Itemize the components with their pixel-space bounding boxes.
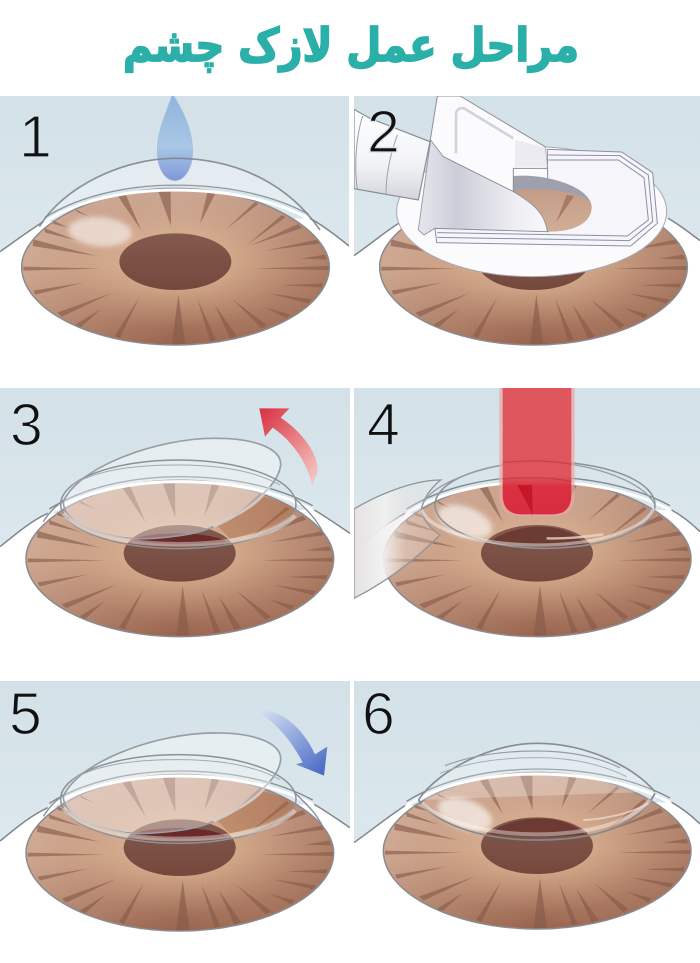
plate edge lines (437, 155, 653, 241)
title: مراحل عمل لازک چشم (123, 18, 579, 73)
folded flap sheet (354, 480, 441, 598)
eye illustration 6 (383, 769, 691, 929)
panel: step 5 replacing the flap (0, 681, 350, 932)
instrument handle (418, 96, 547, 235)
eye illustration 3 (26, 477, 334, 637)
exposed pupil detail (489, 818, 585, 837)
flap bed rings (422, 462, 655, 548)
corneal flap lowering (43, 733, 323, 843)
step number 2: 2 (367, 99, 400, 165)
eye illustration 5 (26, 771, 334, 931)
panel: step 4 laser beam (354, 388, 700, 638)
eye illustration 2 (378, 217, 688, 346)
restored cornea dome and flap rings (418, 743, 655, 840)
eye illustration 4 (383, 477, 691, 637)
eyeball sclera 4 (354, 510, 700, 671)
eyeball sclera 1 (0, 218, 349, 381)
corneal dome outline 1 (39, 158, 320, 230)
arrow: blue closing arrow (254, 711, 327, 776)
panel: step 1 anaesthetic drop (0, 96, 349, 346)
corneal flap lifted (43, 438, 323, 549)
iris highlight 6 (433, 791, 497, 838)
iris highlight 4 (435, 502, 495, 542)
eyeball sclera 2 (354, 218, 700, 381)
ring opening showing iris (513, 176, 592, 232)
eye illustration 1 (22, 185, 329, 345)
panel: step 6 flap repositioned (354, 681, 700, 930)
panel: step 2 suction ring instrument (354, 96, 700, 346)
instrument tube (354, 109, 430, 200)
instrument base plate (435, 149, 657, 246)
arrow: red lifting arrow (259, 408, 318, 485)
step number 5: 5 (9, 681, 42, 747)
corneal dome 1 (48, 160, 304, 215)
step number 1: 1 (19, 104, 52, 170)
eyeball sclera 3 (0, 510, 350, 671)
step number 3: 3 (10, 392, 43, 458)
panel: step 3 lifting the flap (0, 388, 350, 638)
step number 4: 4 (367, 392, 400, 458)
eyeball sclera 5 (0, 804, 350, 963)
suction ring disc (397, 147, 667, 277)
laser beam (499, 388, 575, 516)
eyeball sclera 6 (354, 802, 700, 963)
iris highlight 1 (67, 215, 133, 249)
icon: eye drop (157, 96, 193, 181)
step number 6: 6 (362, 681, 395, 747)
exposed pupil bed (488, 527, 585, 546)
